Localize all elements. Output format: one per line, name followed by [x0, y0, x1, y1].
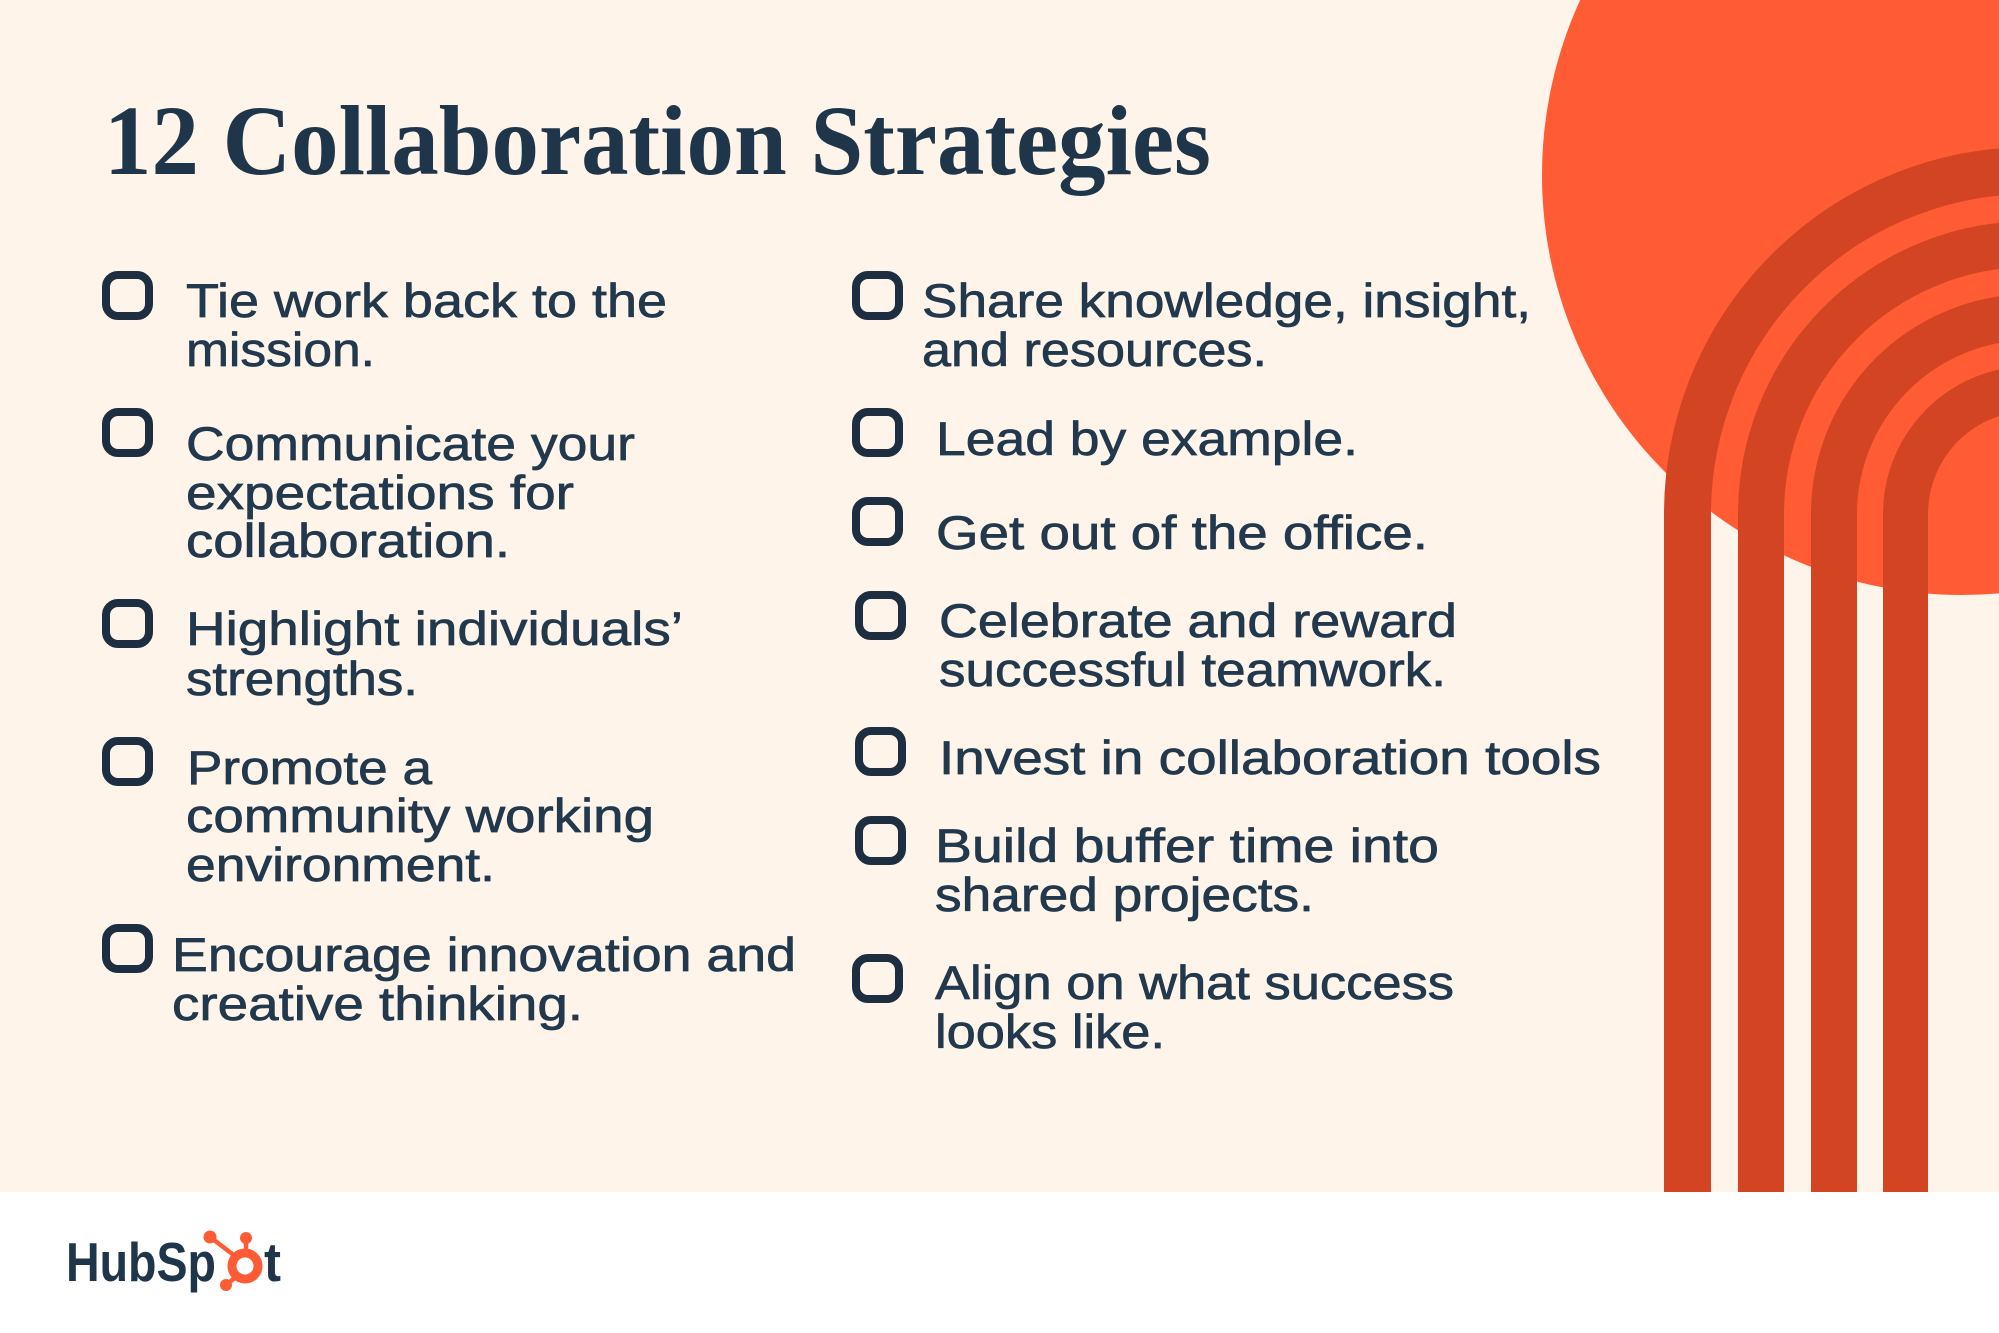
strategy: buffer time: [859, 819, 1439, 921]
strategy: encourage innovation: [106, 928, 796, 1030]
checkbox: [106, 603, 149, 644]
strategy text: Build buffer time into: [935, 819, 1439, 872]
strategy text: collaboration.: [186, 514, 510, 567]
logo wordmark: t: [264, 1231, 281, 1293]
strategy: celebrate teamwork: [859, 594, 1457, 696]
strategy text: and resources.: [922, 323, 1267, 376]
strategy: align on success: [856, 956, 1454, 1058]
left column of strategies: [106, 274, 796, 1030]
logo: HubSpot: [66, 1230, 281, 1293]
strategy text: Celebrate and reward: [939, 594, 1457, 647]
strategy text: [186, 417, 635, 567]
strategy text: Communicate your: [186, 417, 635, 470]
strategy text: [186, 274, 667, 376]
decoration: sun and arches: [1542, 0, 1999, 1192]
checkbox: [859, 595, 902, 636]
strategy text: successful teamwork.: [939, 643, 1446, 696]
right column of strategies: [856, 274, 1601, 1058]
checkbox: [856, 501, 899, 542]
orange circle: [1542, 0, 1999, 595]
checkbox: [106, 928, 149, 969]
strategy: get out of the office: [856, 501, 1428, 559]
checkbox: [856, 958, 899, 999]
title: 12 Collaboration Strategies: [104, 85, 1211, 196]
strategy text: Highlight individuals’: [186, 602, 683, 655]
strategy text: [935, 956, 1454, 1058]
checkbox: [859, 820, 902, 861]
strategy text: mission.: [186, 323, 375, 376]
strategy text: Align on what success: [935, 956, 1454, 1009]
strategy: share knowledge: [856, 274, 1531, 376]
strategy text: Invest in collaboration tools: [939, 731, 1601, 784]
strategy text: [922, 274, 1531, 376]
arch 2: [1761, 244, 1999, 1192]
checkbox: [856, 275, 899, 316]
strategy text: [935, 819, 1439, 921]
strategy text: Encourage innovation and: [172, 928, 796, 981]
strategy text: environment.: [186, 838, 495, 891]
strategy: community environment: [106, 741, 654, 891]
strategy text: [939, 594, 1457, 696]
strategy text: [186, 602, 683, 705]
strategy text: Promote a: [187, 741, 433, 794]
strategy text: Share knowledge, insight,: [922, 274, 1531, 327]
arch 4: [1906, 388, 1999, 1192]
arch 1: [1688, 170, 1999, 1192]
strategy: communicate expectations: [106, 412, 635, 567]
checkbox: [859, 731, 902, 772]
checkbox: [106, 412, 149, 453]
strategy text: expectations for: [186, 466, 574, 519]
strategy text: strengths.: [186, 652, 418, 705]
strategy: invest in tools: [859, 731, 1601, 784]
strategy text: community working: [186, 789, 654, 842]
strategy text: [186, 741, 654, 891]
strategy text: Lead by example.: [936, 412, 1358, 465]
strategy: tie work back: [106, 274, 667, 376]
strategy: lead by example: [856, 412, 1358, 465]
strategy text: Get out of the office.: [936, 506, 1428, 559]
strategy text: [172, 928, 796, 1030]
checkbox: [106, 275, 149, 316]
footer: white band: [0, 1192, 1999, 1333]
strategy text: creative thinking.: [172, 977, 583, 1030]
strategy text: shared projects.: [935, 868, 1314, 921]
checkbox: [106, 741, 149, 782]
arch 3: [1834, 317, 1999, 1192]
checkbox: [856, 412, 899, 453]
logo sprocket: [204, 1230, 258, 1291]
logo wordmark: HubSp: [66, 1231, 216, 1293]
strategy: highlight strengths: [106, 602, 683, 705]
strategy text: Tie work back to the: [186, 274, 667, 327]
strategy text: looks like.: [935, 1005, 1165, 1058]
